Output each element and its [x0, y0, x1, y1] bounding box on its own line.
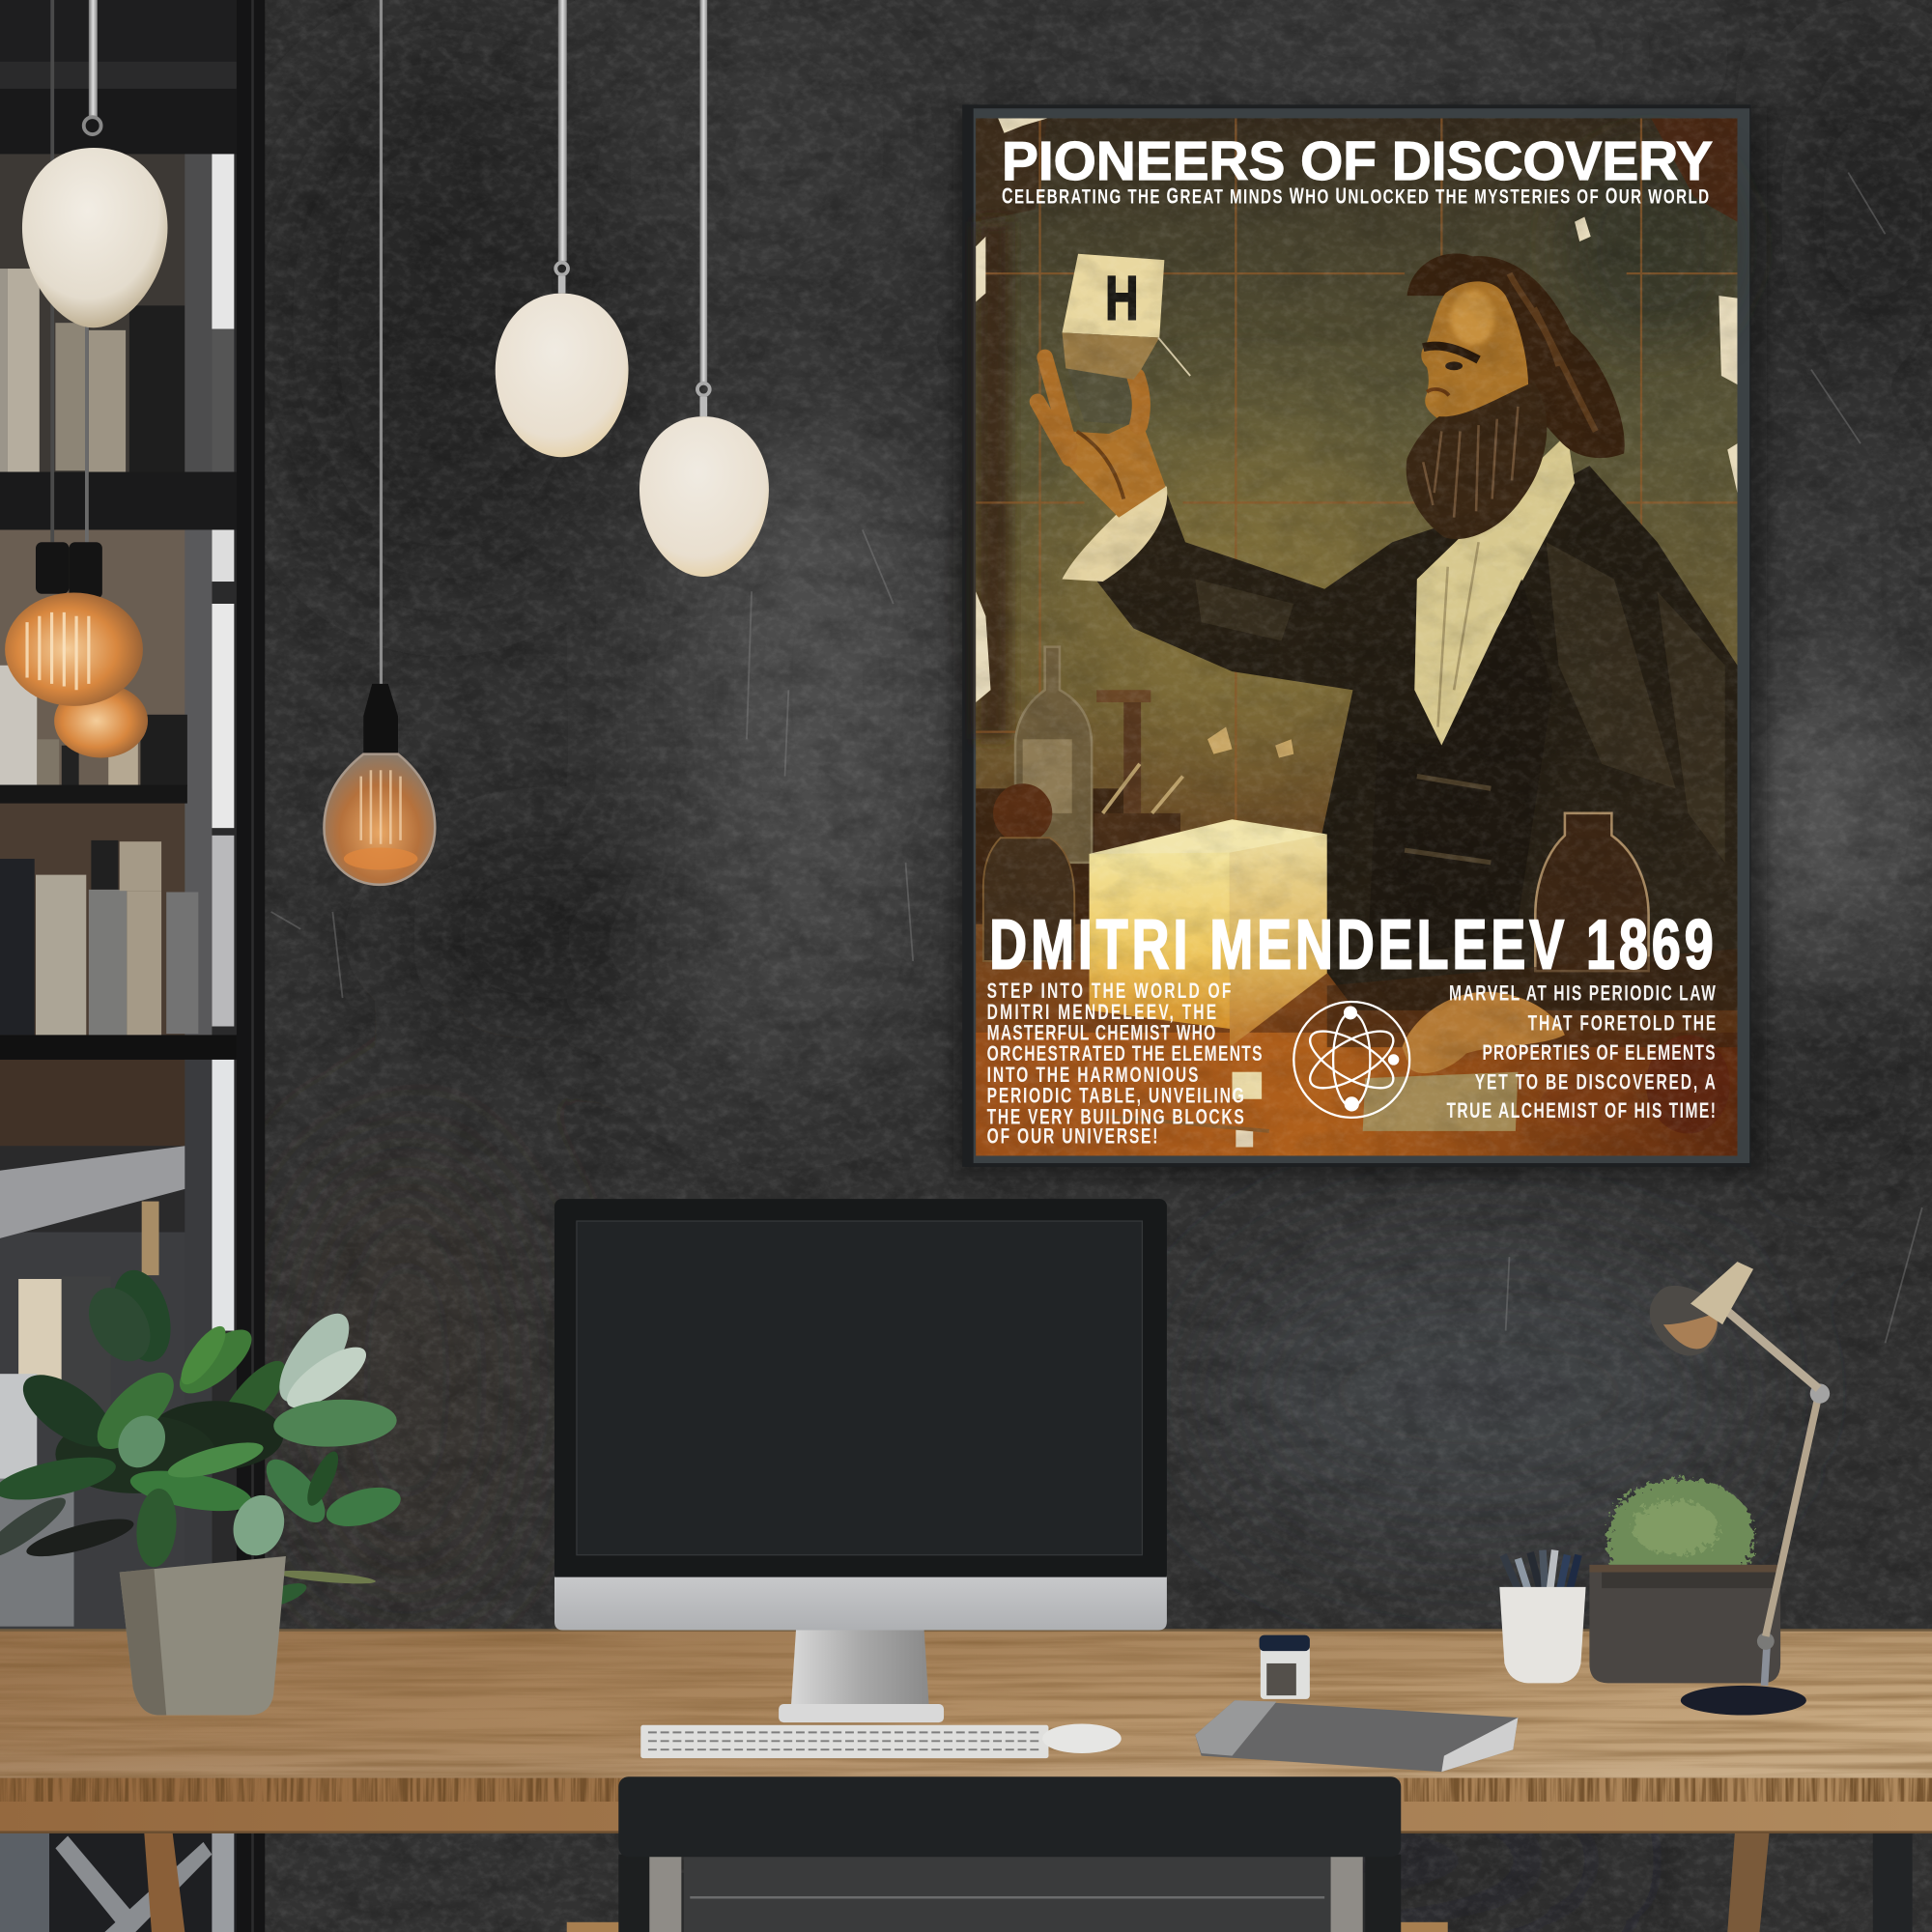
- glow on tiles: [1072, 431, 1417, 752]
- scientist face: [1421, 281, 1528, 426]
- poster subtitle: CELEBRATING THE GREAT MINDS WHO UNLOCKED THE MYSTERIES OF OUR WORLD: [1002, 185, 1709, 209]
- hydrogen cube: [1062, 254, 1190, 380]
- keyboard: [640, 1725, 1048, 1758]
- top-row books: [0, 154, 234, 474]
- middle-row objects: [0, 666, 187, 788]
- scientist name and year: DMITRI MENDELEEV 1869: [989, 905, 1714, 983]
- worn paper patches: [976, 118, 1737, 702]
- desk top: [0, 1629, 1932, 1833]
- white egg pendant 2: [496, 0, 629, 457]
- right paragraph: TRUE ALCHEMIST OF HIS TIME!: [1446, 1099, 1716, 1123]
- desk lamp: [1650, 1262, 1830, 1716]
- left paragraph: OF OUR UNIVERSE!: [987, 1125, 1157, 1149]
- poster frame: [953, 104, 1767, 1178]
- cuff: [1062, 478, 1167, 582]
- table: [976, 1033, 1737, 1155]
- poster art: [976, 118, 1737, 1155]
- large white cube: [1090, 819, 1327, 1047]
- shadow under cube: [1067, 367, 1136, 425]
- scientist hair: [1407, 254, 1625, 458]
- scientist beard: [1406, 382, 1547, 539]
- small cube: [1233, 1072, 1262, 1099]
- bell jar: [1535, 813, 1649, 971]
- poster title: PIONEERS OF DISCOVERY: [1002, 130, 1713, 191]
- mouse: [1042, 1723, 1122, 1753]
- book on table: [1363, 1072, 1518, 1131]
- white egg pendant 3: [639, 0, 769, 577]
- tile grid: [976, 118, 1737, 838]
- monitor stand: [779, 1631, 944, 1722]
- scientist coat: [1091, 466, 1737, 1010]
- small planter with herb: [1589, 1479, 1780, 1683]
- left paragraph: MASTERFUL CHEMIST WHO: [987, 1022, 1215, 1045]
- right paragraph: PROPERTIES OF ELEMENTS: [1482, 1041, 1716, 1065]
- pendant lamps on the left shelf: [5, 0, 148, 757]
- coat highlights: [1195, 542, 1725, 863]
- monitor: [554, 1199, 1167, 1722]
- left lab bottles: [976, 647, 1293, 961]
- left paragraph: PERIODIC TABLE, UNVEILING: [987, 1085, 1244, 1108]
- right paragraph: YET TO BE DISCOVERED, A: [1475, 1071, 1716, 1094]
- left paragraph: DMITRI MENDELEEV, THE: [987, 1001, 1216, 1025]
- plant pot: [120, 1556, 286, 1716]
- bookshelf: [0, 0, 265, 1932]
- left paragraph: THE VERY BUILDING BLOCKS: [987, 1106, 1244, 1129]
- hand on table: [1403, 992, 1565, 1073]
- white egg pendant 1: [22, 0, 167, 327]
- lower-row books: [0, 840, 198, 1035]
- icon: atom: [1293, 1002, 1409, 1118]
- left paragraph: INTO THE HARMONIOUS: [987, 1064, 1199, 1088]
- chair: [567, 1776, 1448, 1932]
- waistcoat: [1368, 579, 1552, 961]
- shirt: [1414, 434, 1575, 746]
- desk legs: [144, 1833, 1913, 1932]
- right flasks: [1646, 1035, 1730, 1133]
- raised hand: [1037, 357, 1166, 518]
- bottom-shelf books: [0, 1276, 111, 1627]
- right paragraph: THAT FORETOLD THE: [1528, 1012, 1716, 1036]
- left paragraph: STEP INTO THE WORLD OF: [987, 980, 1232, 1004]
- notebook: [1195, 1700, 1518, 1772]
- left paragraph: [987, 980, 1263, 1149]
- left paragraph: ORCHESTRATED THE ELEMENTS: [987, 1043, 1263, 1066]
- plant: left rubber plant: [0, 1264, 405, 1716]
- filament bulb: [324, 0, 435, 885]
- hydrogen cube: H: [1105, 263, 1139, 332]
- right paragraph: [1446, 982, 1717, 1123]
- pen cup: [1499, 1550, 1586, 1683]
- right paragraph: MARVEL AT HIS PERIODIC LAW: [1449, 982, 1717, 1007]
- jar: [1260, 1635, 1310, 1699]
- monitor chin: [554, 1577, 1167, 1631]
